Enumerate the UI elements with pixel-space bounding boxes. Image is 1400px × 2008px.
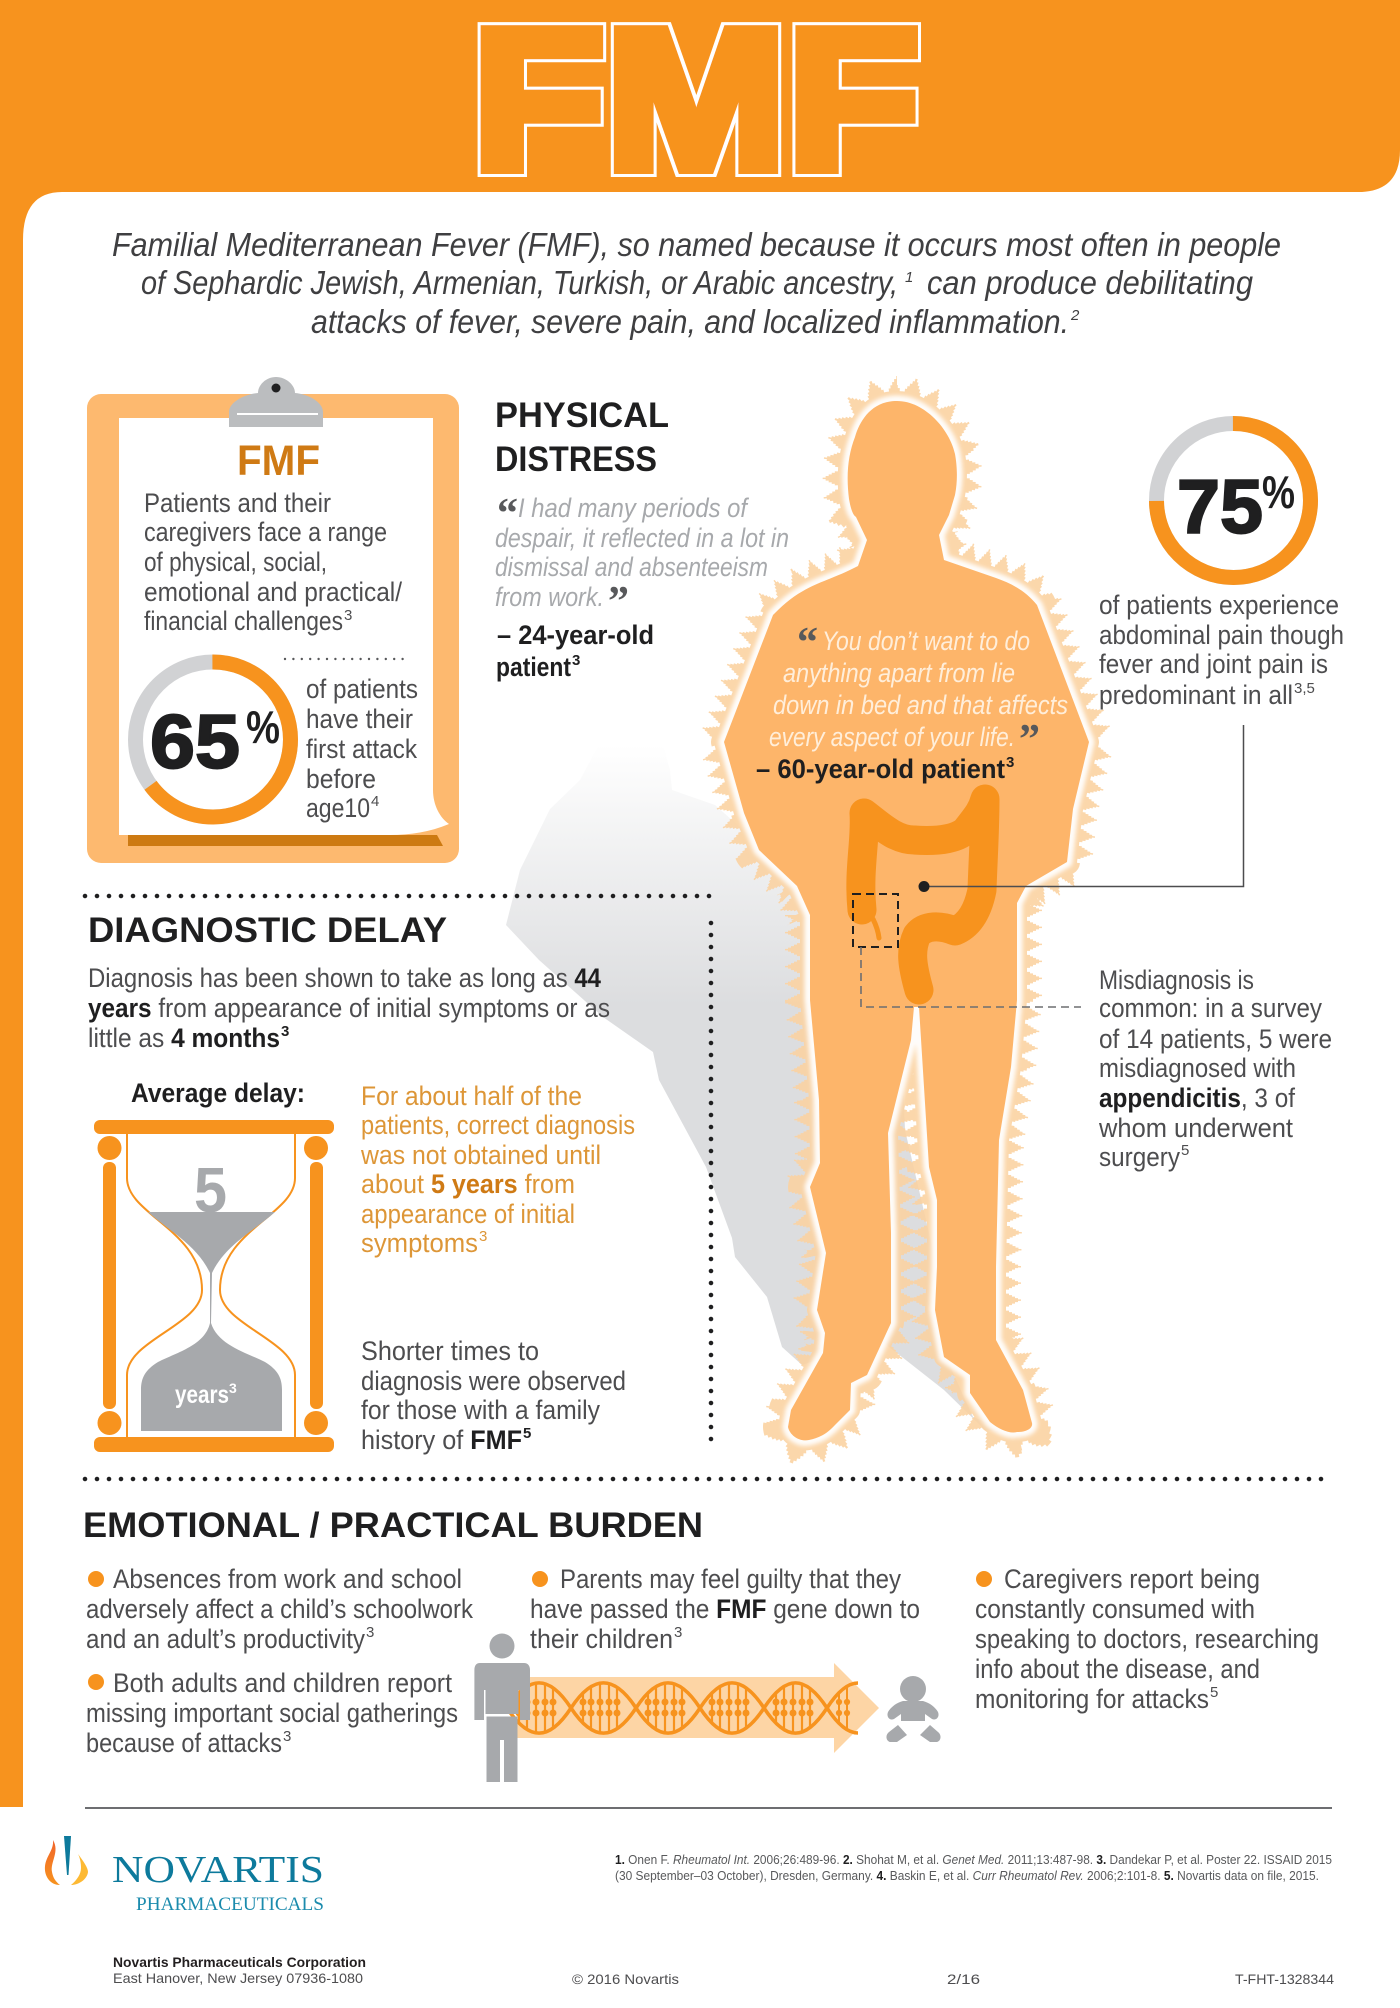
heading: DIAGNOSTIC DELAY	[88, 911, 447, 950]
abdominal pain caption: fever and joint pain is	[1099, 649, 1328, 679]
stat caption: first attack	[306, 734, 417, 764]
patient quote: I had many periods of	[518, 493, 749, 523]
heading: EMOTIONAL / PRACTICAL BURDEN	[83, 1506, 703, 1545]
body figure with spiky pain halo	[724, 401, 1244, 1440]
intro text	[88, 963, 610, 1053]
bullet: absences: 3	[366, 1624, 374, 1641]
bullet: caregivers: speaking to doctors, researching	[975, 1624, 1319, 1654]
misdiagnosis caption	[1098, 965, 1332, 1172]
misdiagnosis caption: whom underwent	[1098, 1113, 1293, 1143]
bullet: parents	[530, 1564, 920, 1654]
patient quote: “	[497, 491, 518, 537]
donut chart: 75 percent: %	[1262, 466, 1295, 518]
donut chart: 65 percent	[136, 662, 290, 817]
abdominal pain caption: predominant in all	[1099, 680, 1293, 710]
section: diagnostic delay	[88, 911, 635, 1455]
bullet: social gatherings: 3	[283, 1728, 291, 1745]
stat caption: before	[306, 764, 376, 794]
bullet: absences: adversely affect a child’s schoolwork	[86, 1594, 473, 1624]
bullet: social gatherings: because of attacks	[86, 1728, 282, 1758]
bullet: absences: Absences from work and school	[113, 1564, 462, 1594]
misdiagnosis caption: common: in a survey	[1099, 993, 1322, 1023]
patient quote in body: anything apart from lie	[783, 658, 1015, 688]
intro text: 3	[281, 1023, 289, 1040]
hourglass label: years	[175, 1381, 229, 1409]
half of patients text: appearance of initial	[361, 1199, 575, 1229]
family history text: 5	[523, 1425, 531, 1442]
section: physical distress: DISTRESS	[495, 440, 657, 479]
intro text: of Sephardic Jewish, Armenian, Turkish, or Arabic ancestry,	[141, 264, 898, 301]
bullet: social gatherings: Both adults and children report	[113, 1668, 452, 1698]
bullet: absences	[86, 1564, 473, 1654]
misdiagnosis caption: of 14 patients, 5 were	[1099, 1024, 1332, 1054]
corporate address	[113, 1954, 366, 1986]
patient quote: ”	[608, 579, 629, 625]
clipboard text	[144, 488, 402, 636]
clipboard text: of physical, social,	[144, 547, 327, 577]
patient quote in body: You don’t want to do	[822, 626, 1030, 656]
misdiagnosis caption: 5	[1181, 1142, 1189, 1159]
stat caption: have their	[306, 704, 413, 734]
icon: parent	[474, 1634, 530, 1782]
icon: hourglass: 3	[229, 1380, 237, 1396]
paper sheet	[119, 418, 449, 835]
patient quote in body: “	[797, 620, 818, 666]
section: emotional practical burden	[83, 1506, 1319, 1782]
panel: clipboard	[87, 377, 459, 863]
patient quote: despair, it reflected in a lot in	[495, 523, 789, 553]
dotted dividers	[85, 896, 1328, 1479]
bullet: social gatherings	[86, 1668, 458, 1758]
intro text: attacks of fever, severe pain, and localized inflammation.	[311, 303, 1069, 340]
average delay label: Average delay:	[131, 1078, 305, 1108]
stat caption: age10	[306, 793, 370, 823]
abdominal pain caption: 3,5	[1294, 680, 1315, 697]
bullet: social gatherings: missing important social gatherings	[86, 1698, 458, 1728]
donut chart: 75 percent: 75	[1177, 465, 1263, 550]
footer rule	[85, 1807, 1332, 1809]
clipboard board	[87, 394, 459, 863]
misdiagnosis caption: surgery	[1099, 1142, 1180, 1172]
arrow with DNA helix	[507, 1663, 879, 1753]
patient quote: from work.	[495, 582, 604, 612]
misdiagnosis caption: Misdiagnosis is	[1099, 965, 1254, 995]
bullet: parents: their children	[530, 1624, 673, 1654]
stat caption: 4	[371, 793, 379, 810]
bullet: absences: and an adult’s productivity	[86, 1624, 365, 1654]
clipboard text: emotional and practical/	[144, 577, 402, 607]
page number: 2/16	[947, 1971, 980, 1987]
intro text: Diagnosis has been shown to take as long as 44	[88, 963, 601, 993]
patient quote	[495, 491, 789, 682]
half of patients text: For about half of the	[361, 1081, 582, 1111]
abdominal pain caption	[1099, 590, 1344, 710]
donut chart: 65 percent: 65	[150, 700, 240, 785]
clipboard text: Patients and their	[144, 488, 331, 518]
intro text: 1	[905, 269, 913, 286]
logo: Novartis: NOVARTIS	[112, 1849, 324, 1891]
bullet: caregivers: Caregivers report being	[1004, 1564, 1260, 1594]
half of patients text: 3	[479, 1228, 487, 1245]
patient quote in body: down in bed and that affects	[773, 690, 1068, 720]
half of patients text: about 5 years from	[361, 1169, 575, 1199]
heading: PHYSICAL	[495, 396, 669, 435]
intro text: little as 4 months	[88, 1023, 280, 1053]
clip	[229, 377, 323, 427]
silhouette	[724, 401, 1089, 1440]
clipboard text: financial challenges	[144, 606, 343, 636]
bullet: parents: have passed the FMF gene down to	[530, 1594, 920, 1624]
bullet: caregivers: 5	[1210, 1684, 1218, 1701]
frame	[94, 1120, 334, 1452]
references: 1. Onen F. Rheumatol Int. 2006;26:489-96. 2. Shohat M, et al. Genet Med. 2011;13:487-98. 3. Dandekar P, et al. Poster 22. ISSAID 2015	[615, 1852, 1332, 1867]
bullet: parents: 3	[674, 1624, 682, 1641]
patient quote in body: ”	[1019, 717, 1040, 763]
icon: hourglass	[94, 1120, 334, 1452]
patient quote: – 24-year-old	[497, 620, 654, 650]
patient quote in body: every aspect of your life.	[769, 722, 1015, 752]
stat caption	[306, 674, 418, 823]
half of patients text: patients, correct diagnosis	[361, 1110, 635, 1140]
colon	[861, 799, 985, 990]
patient quote: dismissal and absenteeism	[495, 552, 768, 582]
half of patients text	[360, 1081, 635, 1258]
references: (30 September–03 October), Dresden, Germany. 4. Baskin E, et al. Curr Rheumatol Rev. 2006;2:101-8. 5. Novartis data on file, 2015.	[615, 1868, 1319, 1883]
half of patients text: symptoms	[361, 1228, 478, 1258]
patient quote: patient	[496, 652, 571, 682]
logo: Novartis	[45, 1836, 324, 1915]
family history text: for those with a family	[361, 1395, 600, 1425]
hourglass number: 5	[194, 1154, 227, 1226]
corporate address: Novartis Pharmaceuticals Corporation	[113, 1954, 366, 1970]
copyright: © 2016 Novartis	[572, 1971, 679, 1987]
bullet: caregivers: info about the disease, and	[975, 1654, 1260, 1684]
clipboard heading: FMF	[237, 437, 320, 485]
donut chart: 75 percent	[1156, 424, 1310, 578]
patient quote: 3	[572, 652, 580, 669]
patient quote in body	[756, 620, 1068, 784]
bullet: caregivers: monitoring for attacks	[975, 1684, 1209, 1714]
corporate address: East Hanover, New Jersey 07936-1080	[113, 1970, 363, 1986]
family history text: diagnosis were observed	[361, 1366, 626, 1396]
intro text: years from appearance of initial symptoms or as	[88, 993, 610, 1023]
misdiagnosis caption: appendicitis, 3 of	[1099, 1083, 1295, 1113]
intro text: 2	[1070, 307, 1080, 324]
abdominal pain caption: of patients experience	[1099, 590, 1339, 620]
logo mark	[45, 1836, 88, 1885]
clipboard text: caregivers face a range	[144, 517, 387, 547]
bullet: caregivers	[975, 1564, 1319, 1714]
clipboard text: 3	[344, 607, 352, 624]
misdiagnosis caption: misdiagnosed with	[1099, 1053, 1296, 1083]
family history text	[361, 1336, 626, 1455]
logo: Novartis: PHARMACEUTICALS	[136, 1894, 324, 1915]
intro text: Familial Mediterranean Fever (FMF), so named because it occurs most often in people	[112, 226, 1281, 263]
donut chart: 65 percent: %	[246, 701, 280, 753]
abdominal pain caption: abdominal pain though	[1099, 620, 1344, 650]
family history text: Shorter times to	[361, 1336, 539, 1366]
spiky halo	[724, 401, 1089, 1440]
pain point marker	[918, 725, 1244, 892]
bullet: caregivers: constantly consumed with	[975, 1594, 1255, 1624]
paper shadow	[128, 835, 443, 846]
family history text: history of FMF	[361, 1425, 522, 1455]
sand	[141, 1212, 282, 1431]
icon: child	[886, 1676, 941, 1742]
intro text: can produce debilitating	[927, 264, 1254, 301]
patient quote in body: 3	[1006, 754, 1014, 771]
appendix highlight box	[853, 894, 1081, 1007]
patient quote in body: – 60-year-old patient	[756, 754, 1005, 784]
stat caption: of patients	[306, 674, 418, 704]
document code: T-FHT-1328344	[1235, 1971, 1334, 1987]
bullet: parents: Parents may feel guilty that they	[560, 1564, 901, 1594]
glass	[127, 1134, 295, 1437]
references	[615, 1852, 1332, 1883]
half of patients text: was not obtained until	[360, 1140, 601, 1170]
section: physical distress	[495, 396, 789, 682]
intro text	[112, 226, 1281, 340]
body shadow	[506, 719, 1026, 1437]
